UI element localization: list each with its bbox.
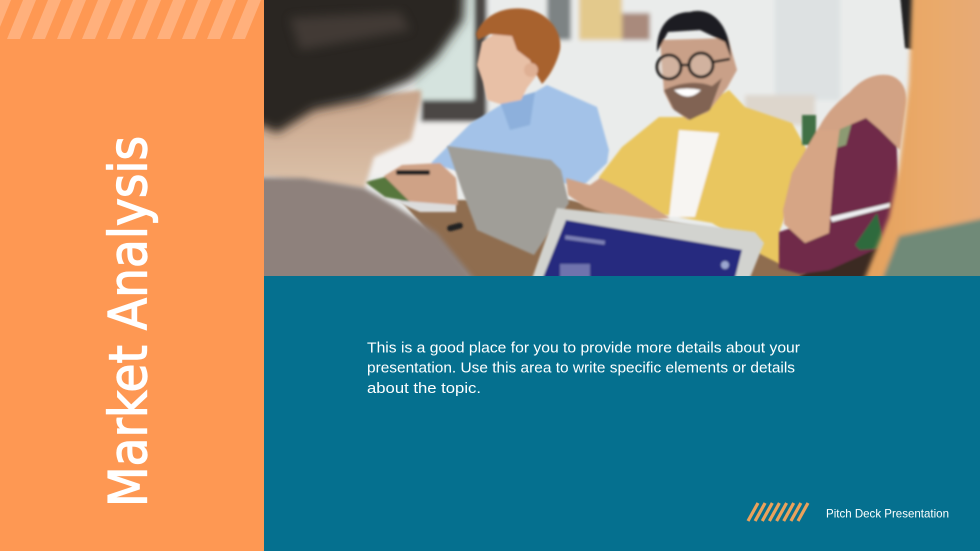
person: foreground red-blonde hair bbox=[860, 0, 980, 290]
person: man in yellow jacket bbox=[566, 11, 807, 265]
person: foreground dark-haired back of head bbox=[264, 0, 475, 276]
body text: This is a good place for you to provide more details about your bbox=[367, 340, 800, 356]
panel: teal content bbox=[264, 276, 980, 551]
body text: presentation. Use this area to write specific elements or details bbox=[367, 360, 795, 376]
table bbox=[400, 198, 807, 276]
laptop: grey bbox=[447, 146, 569, 255]
footer label: Pitch Deck Presentation bbox=[826, 506, 949, 520]
person: maroon sweater, clasped hands bbox=[779, 0, 920, 290]
panel: orange sidebar bbox=[0, 0, 264, 551]
photo: team meeting around a table bbox=[264, 0, 980, 276]
person: red-haired man bbox=[365, 8, 609, 232]
laptop: foreground with blue screen bbox=[532, 207, 765, 276]
title: Market Analysis bbox=[98, 136, 160, 507]
background wall bbox=[264, 0, 914, 244]
stripe pattern bbox=[0, 0, 261, 39]
footer stripes icon bbox=[748, 503, 808, 521]
body text bbox=[367, 340, 800, 397]
body text: about the topic. bbox=[367, 380, 481, 397]
